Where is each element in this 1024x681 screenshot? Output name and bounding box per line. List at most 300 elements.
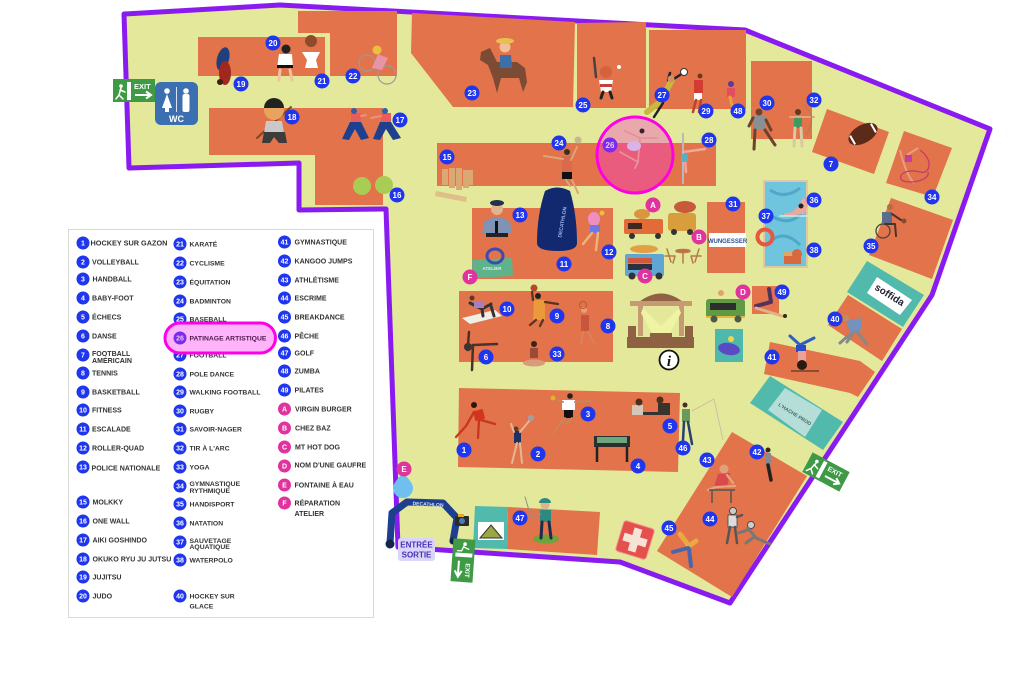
legend 17: AIKI GOSHINDO	[92, 538, 147, 544]
legend 13	[76, 460, 161, 474]
map marker 37	[758, 208, 774, 224]
athlete: archer	[790, 105, 814, 146]
map marker 11: 11	[560, 260, 569, 269]
map marker 16	[390, 188, 404, 202]
legend 35	[174, 498, 235, 510]
icon: inflatable entrance arch: DECATHLON	[412, 501, 444, 509]
map marker 27: 27	[658, 91, 667, 100]
map marker 24	[552, 136, 566, 150]
map marker 38: 38	[810, 246, 819, 255]
legend 5: ÉCHECS	[92, 312, 122, 322]
label: entrée sortie: ENTRÉE	[400, 540, 433, 550]
legend 34: 34	[176, 484, 184, 490]
legend 29	[174, 386, 260, 398]
legend 45: BREAKDANCE	[294, 314, 345, 322]
legend 28: POLE DANCE	[190, 372, 235, 378]
map marker 7: 7	[829, 160, 834, 169]
legend 47: GOLF	[294, 350, 315, 358]
map marker 10	[500, 302, 514, 316]
legend D	[278, 460, 367, 472]
map marker 22	[346, 68, 360, 84]
map marker 15: 15	[443, 153, 452, 162]
sponsor: Soffida: soffida	[872, 282, 906, 309]
legend A	[278, 402, 352, 416]
map marker 19	[234, 76, 248, 92]
legend 12	[76, 442, 144, 454]
legend 27: 27	[176, 352, 184, 360]
sponsor: Leroy teal block	[473, 506, 508, 549]
athlete: badminton	[544, 136, 582, 193]
athlete: roller quad	[583, 210, 604, 250]
legend 41: 41	[281, 240, 288, 246]
map marker 13	[512, 208, 528, 222]
legend 22: CYCLISME	[190, 260, 225, 268]
icon: inflatable entrance arch	[386, 501, 457, 548]
sponsor: L'Hache Prod: L'HACHE PROD	[777, 402, 812, 428]
athlete: gymnastics handstand	[790, 336, 819, 371]
legend 3: HANDBALL	[92, 276, 132, 284]
map marker 9: 9	[555, 312, 560, 321]
legend E	[278, 478, 354, 492]
map marker 46	[676, 440, 690, 456]
legend 1	[76, 236, 167, 250]
legend 43: ATHLÉTISME	[294, 276, 339, 284]
legend 32	[174, 442, 230, 454]
legend 10: 10	[79, 408, 87, 414]
map marker 6	[478, 350, 494, 364]
legend C	[278, 440, 341, 454]
athlete: handball	[550, 393, 590, 433]
legend 33: YOGA	[190, 464, 210, 472]
athlete: tennis	[580, 302, 594, 343]
legend 46: 46	[281, 334, 288, 340]
athlete: zumba	[727, 81, 735, 110]
map marker 4: 4	[636, 462, 641, 471]
legend 36	[174, 516, 223, 530]
sponsor: Soffida	[847, 261, 924, 327]
legend 24: 24	[176, 298, 184, 306]
map marker 33: 33	[553, 350, 562, 359]
map marker 44	[702, 512, 718, 526]
athlete: basketball	[530, 284, 558, 326]
map marker 1	[456, 442, 472, 458]
legend 26 highlighted	[165, 323, 276, 353]
icon: american football	[845, 118, 881, 150]
sponsor: atelier: ATELIER	[483, 266, 502, 271]
legend 5: 5	[81, 314, 85, 322]
map marker 29: 29	[702, 107, 711, 116]
legend 26 highlighted: 26	[176, 336, 184, 342]
sponsor: L'Hache Prod	[750, 376, 843, 450]
legend 4: 4	[81, 296, 85, 302]
legend 21	[174, 238, 218, 250]
icon: exit sign bottom: EXIT	[463, 563, 471, 578]
legend 40	[174, 590, 235, 610]
map marker 3: 3	[586, 410, 591, 419]
map marker D: D	[740, 288, 746, 297]
legend 30: RUGBY	[190, 408, 215, 416]
map marker 4	[630, 458, 646, 474]
map marker 6: 6	[484, 353, 489, 362]
legend 43	[278, 274, 339, 286]
legend 45	[278, 310, 345, 324]
map marker 41	[764, 350, 780, 364]
legend 11: ESCALADE	[92, 426, 131, 434]
icon: stage	[627, 294, 694, 348]
map marker 17: 17	[396, 116, 405, 125]
legend 15: MOLKKY	[92, 500, 123, 506]
legend 44: 44	[281, 296, 288, 302]
legend 49: 49	[281, 388, 288, 394]
legend F: F	[282, 500, 287, 508]
map marker 5: 5	[668, 422, 673, 431]
legend 46: PÊCHE	[294, 332, 319, 340]
athlete: golfer	[525, 497, 559, 544]
legend 9: 9	[81, 390, 85, 396]
legend C: C	[282, 444, 287, 452]
athlete: jujitsu	[214, 46, 232, 85]
map marker 42: 42	[753, 448, 762, 457]
legend 32: TIR À L'ARC	[190, 444, 230, 452]
legend 41	[278, 236, 347, 248]
food truck A	[624, 209, 663, 239]
legend 42: KANGOO JUMPS	[294, 258, 353, 266]
legend 45: 45	[281, 314, 288, 322]
map marker 23	[464, 86, 480, 100]
icon: WC sign	[155, 82, 198, 125]
map marker 32	[806, 92, 822, 108]
legend 3	[76, 272, 132, 286]
map marker 44: 44	[706, 515, 715, 524]
activity zones	[198, 11, 953, 597]
athlete: cyclist	[359, 46, 396, 84]
legend 25: 25	[176, 316, 184, 324]
athlete: hurdler	[708, 464, 735, 503]
map marker 16: 16	[393, 191, 402, 200]
map marker 27	[654, 88, 670, 102]
map marker F: F	[468, 273, 473, 282]
map marker 35	[864, 238, 878, 254]
athlete: pilates	[756, 289, 787, 318]
legend 42: 42	[281, 258, 288, 266]
legend 40: HOCKEY SUR	[190, 594, 235, 600]
inflatable climbing wall	[537, 188, 577, 251]
legend 10: FITNESS	[92, 408, 122, 414]
legend 15	[76, 496, 123, 508]
legend 27: FOOTBALL	[190, 352, 226, 360]
icon: exit sign right: EXIT	[826, 466, 844, 480]
legend 7	[76, 348, 132, 365]
map marker 8	[600, 318, 616, 334]
legend 48: ZUMBA	[294, 368, 320, 376]
legend 11	[76, 422, 131, 436]
athlete: karate boy	[277, 44, 293, 80]
legend 31: 31	[176, 426, 184, 434]
legend 11: 11	[79, 426, 87, 434]
map marker 2: 2	[536, 450, 541, 459]
legend 12: ROLLER-QUAD	[92, 446, 144, 452]
legend 17: 17	[79, 538, 87, 544]
legend 6: 6	[81, 334, 85, 340]
map marker 23: 23	[468, 89, 477, 98]
panel: legend	[68, 230, 374, 618]
legend 40: 40	[176, 594, 184, 600]
legend 34: GYMNASTIQUE	[190, 481, 241, 488]
map marker D	[736, 284, 750, 300]
legend 1: 1	[81, 240, 85, 248]
legend 29: 29	[176, 390, 184, 396]
legend 37: 37	[176, 540, 184, 546]
map marker 21: 21	[318, 77, 327, 86]
athlete: rhythmic gymnast	[900, 148, 929, 183]
map marker 13: 13	[516, 211, 525, 220]
legend 24: BADMINTON	[190, 298, 231, 306]
map marker 29	[698, 104, 714, 118]
legend 6: DANSE	[92, 334, 117, 340]
legend 19	[76, 570, 121, 584]
map marker 12	[602, 244, 616, 260]
icon: camera	[455, 514, 469, 526]
legend 38	[174, 554, 233, 566]
legend 10	[76, 404, 122, 416]
food truck D	[706, 290, 745, 322]
map marker A: A	[650, 201, 656, 210]
legend 7: AMÉRICAIN	[92, 356, 132, 365]
legend 42	[278, 254, 353, 268]
map marker 28: 28	[705, 136, 714, 145]
icon: one wall balls	[353, 176, 393, 195]
legend 8: 8	[81, 370, 85, 378]
map marker 35: 35	[867, 242, 876, 251]
map marker 38	[806, 242, 822, 258]
map marker 42	[750, 444, 764, 460]
legend D: NOM D'UNE GAUFRE	[294, 462, 367, 470]
legend 37	[174, 536, 232, 551]
food truck C	[625, 245, 664, 280]
legend 36: 36	[176, 520, 184, 528]
map marker E: E	[401, 465, 407, 474]
food truck B	[668, 201, 696, 235]
legend 35: HANDISPORT	[190, 502, 235, 508]
map marker 9	[550, 308, 564, 324]
map marker 20: 20	[269, 39, 278, 48]
map marker A	[646, 198, 660, 212]
map marker E	[396, 462, 412, 476]
legend 27	[174, 348, 226, 362]
legend B: CHEZ BAZ	[295, 426, 331, 432]
sponsor: atelier	[472, 249, 513, 278]
legend B	[278, 422, 331, 434]
map marker 3	[580, 406, 596, 422]
legend 13: POLICE NATIONALE	[92, 466, 161, 472]
legend 48	[278, 364, 320, 378]
map marker 26	[602, 138, 618, 152]
icon: swimming pool	[764, 181, 809, 267]
athlete: ice hockey	[840, 314, 867, 344]
legend 31	[174, 422, 242, 436]
map marker 30	[760, 96, 774, 110]
legend 41: GYMNASTIQUE	[294, 240, 347, 246]
icon: exit sign right	[802, 452, 850, 492]
legend 47	[278, 346, 315, 360]
icon: café table	[665, 249, 701, 263]
athlete: horse rider	[480, 38, 527, 93]
legend 9	[76, 386, 140, 398]
label: entrée sortie: SORTIE	[402, 550, 432, 560]
venue floor plan outline	[124, 5, 990, 603]
legend A: A	[282, 406, 287, 414]
legend 19: 19	[79, 574, 87, 582]
legend 49	[278, 384, 324, 396]
map marker 18: 18	[288, 113, 297, 122]
map marker 7	[824, 156, 838, 172]
icon: exit sign left	[113, 79, 155, 102]
map marker 19: 19	[237, 80, 246, 89]
map marker 8: 8	[606, 322, 611, 331]
map marker 31: 31	[729, 200, 738, 209]
map marker 36: 36	[810, 196, 819, 205]
map marker 43	[700, 452, 714, 468]
legend 2: VOLLEYBALL	[92, 260, 140, 266]
legend 23	[174, 276, 230, 288]
legend 8	[76, 366, 118, 380]
legend 33	[174, 460, 210, 474]
sponsor: Décathlon teal	[715, 329, 743, 362]
map marker 20	[266, 36, 280, 50]
legend 13: 13	[79, 464, 87, 472]
legend 21: 21	[176, 242, 184, 248]
sponsor: Wungesser: WUNGESSER	[708, 239, 748, 245]
legend C: MT HOT DOG	[295, 444, 341, 452]
legend 2	[76, 256, 140, 268]
map marker 17	[392, 112, 408, 128]
legend 34: RYTHMIQUE	[190, 488, 230, 495]
legend 49: PILATES	[294, 388, 324, 394]
map marker 2	[530, 446, 546, 462]
map marker B: B	[696, 233, 702, 242]
map marker 45: 45	[665, 524, 674, 533]
icon: information	[660, 350, 678, 370]
map marker 49: 49	[778, 288, 787, 297]
map marker 34	[924, 190, 940, 204]
legend 9: BASKETBALL	[92, 390, 140, 396]
map marker 1: 1	[462, 446, 467, 455]
legend D: D	[282, 464, 287, 470]
map marker C: C	[642, 272, 648, 281]
legend 26 highlighted: PATINAGE ARTISTIQUE	[190, 336, 267, 342]
icon: WC sign: WC	[169, 114, 184, 124]
athlete: yoga	[523, 341, 545, 366]
map marker 46: 46	[679, 444, 688, 453]
legend 29: WALKING FOOTBALL	[190, 390, 260, 396]
athlete: police officer	[482, 200, 512, 237]
athlete: breakdance	[673, 534, 696, 566]
map marker 10: 10	[503, 305, 512, 314]
map marker 25: 25	[579, 101, 588, 110]
athlete: field hockey	[456, 402, 495, 438]
icon: life ring	[758, 230, 772, 244]
legend 32: 32	[176, 446, 184, 452]
legend 33: 33	[176, 464, 184, 472]
legend 46	[278, 330, 319, 342]
athlete: wheelchair	[876, 204, 906, 238]
legend 20: JUDO	[92, 594, 113, 600]
icon: water drop fountain	[393, 473, 413, 498]
legend 16: ONE WALL	[92, 518, 130, 526]
legend 17	[76, 534, 147, 546]
athlete: rugby	[749, 108, 775, 149]
athlete: pole dancer	[681, 133, 705, 184]
legend 23: 23	[176, 280, 184, 286]
map marker C	[638, 268, 652, 284]
athlete: volleyball	[511, 415, 534, 463]
map marker B	[692, 230, 706, 244]
legend 21: KARATÉ	[190, 240, 218, 248]
legend 18: 18	[79, 556, 87, 564]
athlete: dance	[464, 332, 497, 370]
legend 18: OKUKO RYU JU JUTSU	[92, 556, 171, 564]
map marker 30: 30	[763, 99, 772, 108]
map marker 12: 12	[605, 248, 614, 257]
legend F	[278, 496, 340, 518]
legend B: B	[282, 426, 287, 432]
map marker 36	[806, 192, 822, 208]
map marker 45	[662, 520, 676, 536]
legend E: E	[282, 482, 287, 490]
map marker F	[462, 270, 478, 284]
map marker 18	[284, 110, 300, 124]
legend 7: 7	[81, 352, 85, 360]
map marker 47	[512, 510, 528, 526]
legend 44: ESCRIME	[294, 296, 327, 302]
legend 44	[278, 292, 327, 304]
legend 37: AQUATIQUE	[190, 544, 230, 551]
athlete: fencers	[727, 508, 770, 544]
legend 16	[76, 514, 130, 528]
legend 12: 12	[79, 446, 87, 452]
athlete: ju jutsu	[257, 98, 291, 143]
legend 28	[174, 368, 235, 380]
legend 40: GLACE	[190, 604, 214, 610]
legend 8: TENNIS	[92, 370, 118, 378]
legend 47: 47	[281, 350, 288, 358]
sponsor: Wungesser	[708, 233, 748, 247]
legend 25: BASEBALL	[190, 316, 227, 324]
legend 4: BABY-FOOT	[92, 296, 134, 302]
icon: baby-foot table	[594, 436, 630, 462]
map marker 40: 40	[831, 315, 840, 324]
map marker 37: 37	[762, 212, 771, 221]
legend 23: ÉQUITATION	[190, 278, 230, 286]
inflatable climbing wall: DECATHLON	[557, 206, 569, 238]
map marker 48: 48	[734, 107, 743, 116]
legend A: VIRGIN BURGER	[295, 406, 352, 414]
map marker 15	[440, 150, 454, 164]
legend 43: 43	[281, 278, 288, 284]
icon: exit sign bottom	[450, 538, 475, 583]
legend F: RÉPARATION	[294, 498, 340, 508]
legend 1: HOCKEY SUR GAZON	[90, 238, 167, 248]
athlete: aiki pair	[342, 108, 401, 140]
icon: exit sign left: EXIT	[134, 82, 151, 91]
map marker 43: 43	[703, 456, 712, 465]
legend 35: 35	[176, 502, 184, 508]
legend 20: 20	[79, 594, 87, 600]
map marker 28	[702, 132, 716, 148]
map marker 34: 34	[928, 193, 937, 202]
legend 48: 48	[281, 368, 288, 376]
legend 4	[76, 292, 134, 304]
